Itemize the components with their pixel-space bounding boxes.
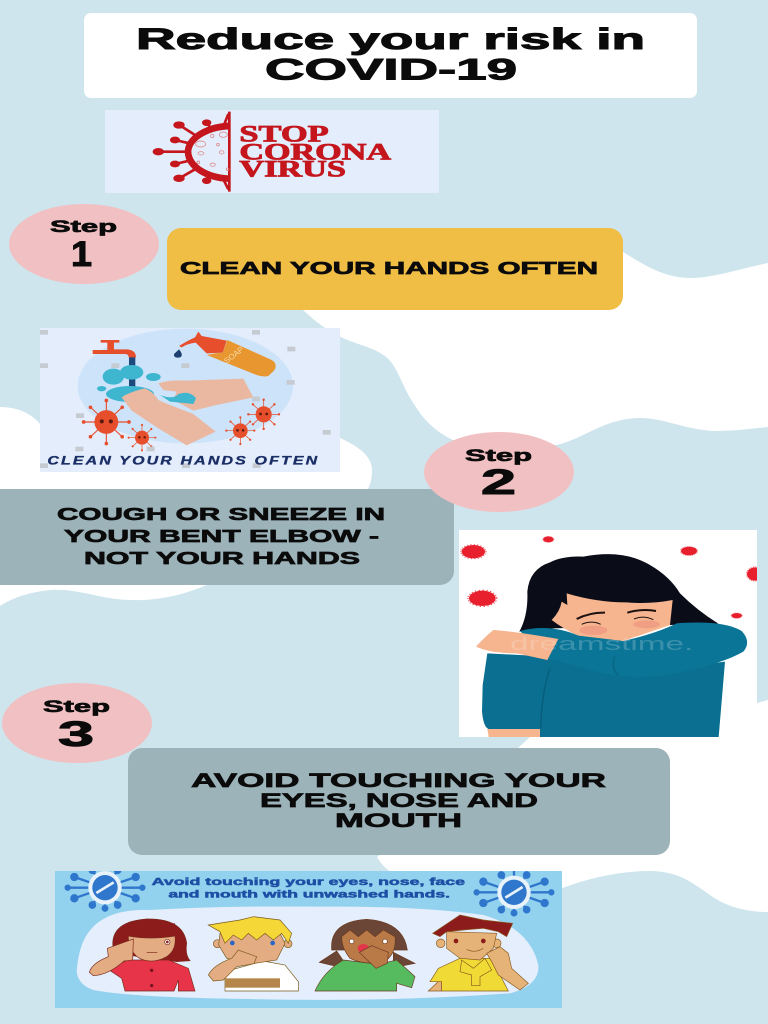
white wave: upper right xyxy=(303,252,768,445)
step 3 heading panel: EYES, NOSE AND xyxy=(260,790,538,812)
child 3 xyxy=(315,919,415,991)
virus icons xyxy=(82,399,280,451)
logo wordmark xyxy=(239,122,391,182)
watermark marks xyxy=(40,330,331,468)
child 4 xyxy=(428,915,528,991)
hair xyxy=(519,554,718,632)
white wave: left xyxy=(0,407,372,606)
virus half emblem xyxy=(154,112,229,192)
illustration: avoid touching face xyxy=(55,866,562,1008)
hand xyxy=(476,630,558,660)
step 1 badge: Step xyxy=(50,217,117,236)
illustration: washing hands xyxy=(40,328,340,472)
step 2 heading panel: COUGH OR SNEEZE IN xyxy=(57,504,385,524)
logo wordmark: STOP xyxy=(239,122,329,148)
icon: soap bottle: SOAP xyxy=(222,345,245,366)
child 2 xyxy=(208,917,298,991)
blob backdrop xyxy=(77,906,538,1000)
skin at lower arm xyxy=(487,729,540,737)
soap on hand xyxy=(160,393,196,404)
step 2 badge: 2 xyxy=(481,463,516,502)
illustration text xyxy=(152,877,465,900)
child 1 xyxy=(89,919,195,991)
logo wordmark: VIRUS xyxy=(239,156,346,182)
step 3 badge: 3 xyxy=(58,715,94,754)
step 3 heading panel xyxy=(128,748,670,855)
step 1 heading panel xyxy=(167,228,623,310)
illustration text: Avoid touching your eyes, nose, face xyxy=(152,877,465,888)
illustration: sneezing into elbow xyxy=(459,530,764,737)
step 2 heading panel xyxy=(0,489,454,585)
icon: back hand xyxy=(158,379,253,411)
face xyxy=(552,593,673,641)
step 2 heading panel: NOT YOUR HANDS xyxy=(84,548,360,568)
bent arm xyxy=(520,623,747,677)
logo wordmark: CORONA xyxy=(239,139,391,165)
icon: faucet xyxy=(93,340,136,400)
title panel: COVID-19 xyxy=(265,54,517,86)
logo: stop corona virus xyxy=(105,110,439,193)
title text: Reduce your risk in xyxy=(136,23,645,56)
step 2 badge: Step xyxy=(465,446,532,465)
illustration text: and mouth with unwashed hands. xyxy=(168,889,450,900)
step 2 badge xyxy=(424,432,574,512)
no-virus icons xyxy=(66,866,553,915)
soap bubbles xyxy=(97,365,161,402)
icon: soap bottle xyxy=(174,332,276,376)
illustration caption: CLEAN YOUR HANDS OFTEN xyxy=(47,453,319,467)
step 1 badge xyxy=(9,204,159,284)
step 3 heading panel: AVOID TOUCHING YOUR xyxy=(191,770,606,792)
watermark: dreamstime. xyxy=(510,633,693,654)
icon: front hand xyxy=(122,388,216,445)
body in teal shirt xyxy=(482,653,725,737)
step 3 badge: Step xyxy=(43,697,110,716)
step 1 heading panel: CLEAN YOUR HANDS OFTEN xyxy=(180,258,598,278)
step 3 heading panel: MOUTH xyxy=(335,810,462,832)
step 1 badge: 1 xyxy=(71,235,92,274)
white wave: lower right xyxy=(377,700,768,912)
step 2 heading panel: YOUR BENT ELBOW - xyxy=(64,526,379,546)
virus particles xyxy=(461,536,764,619)
title panel xyxy=(84,13,697,98)
step 3 badge xyxy=(2,683,152,763)
